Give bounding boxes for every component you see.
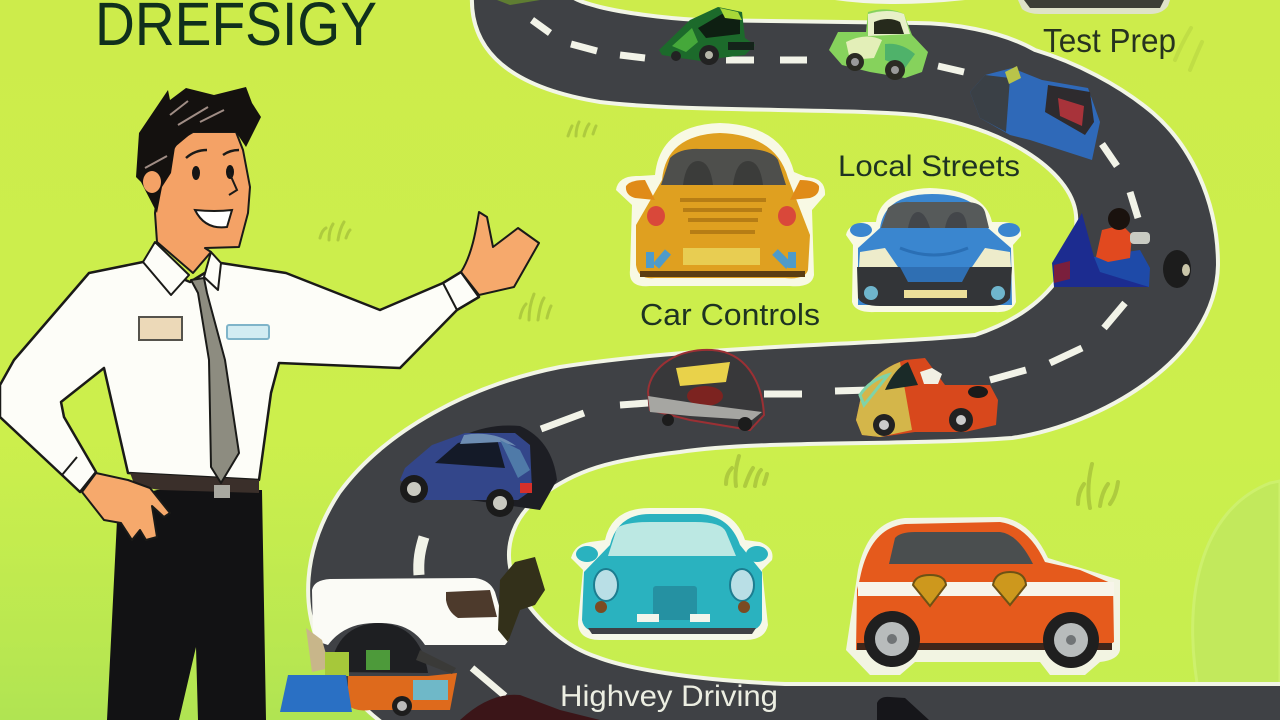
label: highway driving: Highvey Driving	[560, 680, 778, 713]
background hill	[1193, 481, 1280, 700]
trousers	[107, 490, 266, 720]
name badge	[139, 317, 182, 340]
car: green racer	[659, 7, 755, 65]
car: orange and yellow car	[856, 358, 998, 437]
hair highlights	[145, 101, 224, 168]
hand on hip	[82, 473, 170, 540]
label: local streets: Local Streets	[838, 150, 1020, 183]
car: wireframe wreck	[648, 350, 764, 431]
belt	[130, 473, 259, 493]
car sticker: blue car	[846, 188, 1021, 312]
brows	[186, 150, 239, 158]
pointing hand	[461, 212, 539, 295]
car sticker: orange car	[846, 517, 1120, 675]
belt buckle	[214, 485, 230, 498]
ear	[143, 171, 161, 193]
hair	[136, 87, 261, 213]
car sticker: teal car	[571, 508, 772, 640]
car: blue wrecked car	[970, 66, 1100, 160]
presenter character	[0, 87, 539, 720]
tie	[191, 278, 239, 483]
grass tufts	[320, 28, 1202, 508]
car: navy hatchback	[400, 425, 557, 517]
pocket badge	[227, 325, 269, 339]
car sticker: yellow car	[616, 123, 825, 286]
shirt	[0, 262, 479, 492]
car: partly visible cars at top	[497, 0, 965, 5]
car: partially visible cars on highway	[460, 695, 929, 720]
collar	[143, 242, 221, 295]
car: test prep van	[1018, 0, 1170, 14]
eyes	[192, 166, 200, 180]
neck and face	[155, 132, 250, 273]
winding road	[308, 0, 1280, 720]
car: blue kart with driver	[1052, 208, 1191, 288]
smile	[195, 210, 232, 227]
label: test prep: Test Prep	[1043, 22, 1176, 59]
car: green patterned beetle	[829, 9, 928, 80]
nose	[229, 172, 237, 195]
vehicle: white van and luggage	[280, 557, 545, 716]
cuff lines	[62, 283, 457, 492]
label: car controls: Car Controls	[640, 297, 820, 332]
